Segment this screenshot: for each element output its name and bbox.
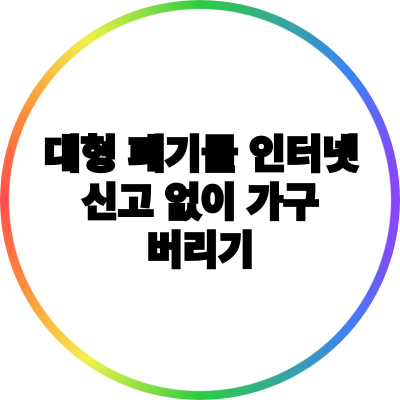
title line 1: 대형 폐기물 인터넷 bbox=[44, 134, 359, 177]
title line 3: 버리기 bbox=[147, 230, 254, 273]
title line 2: 신고 없이 가구 bbox=[82, 182, 319, 225]
